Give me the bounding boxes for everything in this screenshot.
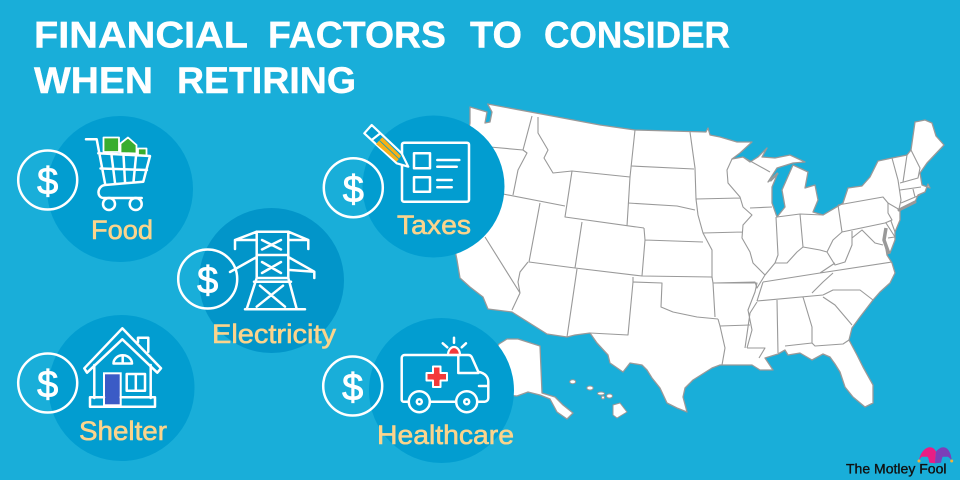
icon: dollar coin xyxy=(178,250,237,308)
label: Electricity: Electricity xyxy=(212,319,337,349)
icon: house xyxy=(84,328,161,407)
icon: dollar coin xyxy=(18,354,77,412)
food background circle xyxy=(47,116,193,262)
title xyxy=(34,14,730,101)
label: Healthcare: Healthcare xyxy=(377,420,514,450)
icon: dollar coin: $ xyxy=(37,364,58,406)
panel: food xyxy=(18,116,193,262)
title: WHEN xyxy=(34,60,153,101)
panel: shelter xyxy=(18,315,195,461)
title: FINANCIAL xyxy=(34,14,248,56)
title: RETIRING xyxy=(177,60,356,101)
map: Alaska xyxy=(480,339,573,419)
icon: dollar coin: $ xyxy=(343,169,364,211)
icon: power pylon xyxy=(230,232,314,309)
label: Food: Food xyxy=(91,215,153,245)
icon: tax form xyxy=(402,143,469,202)
icon: dollar coin xyxy=(18,150,77,210)
electricity background circle xyxy=(199,208,344,353)
title: CONSIDER xyxy=(544,14,730,56)
map: contiguous states outline xyxy=(450,104,944,412)
map: Hawaii xyxy=(570,380,627,418)
title: TO xyxy=(470,14,522,56)
icon: dollar coin xyxy=(323,356,382,416)
icon: pencil xyxy=(364,125,408,167)
icon: dollar coin: $ xyxy=(342,367,363,409)
map: United States xyxy=(450,104,944,419)
icon: dollar coin: $ xyxy=(37,161,58,203)
label: Shelter: Shelter xyxy=(79,416,167,446)
icon: shopping cart xyxy=(86,138,150,210)
title: FACTORS xyxy=(268,14,446,56)
icon: jester hat xyxy=(918,447,953,463)
shelter background circle xyxy=(48,315,194,461)
icon: dollar coin xyxy=(324,158,383,217)
panel: electricity xyxy=(178,208,344,353)
label: Taxes: Taxes xyxy=(397,210,471,240)
taxes background circle xyxy=(362,116,504,258)
icon: dollar coin: $ xyxy=(197,260,218,302)
map: Chesapeake Bay xyxy=(884,228,889,254)
map: state borders xyxy=(485,116,921,365)
panel: taxes xyxy=(324,116,504,258)
map: Long Island xyxy=(899,202,915,210)
logo wordmark: The Motley Fool xyxy=(846,460,946,476)
logo: The Motley Fool xyxy=(846,447,953,476)
icon: ambulance xyxy=(402,338,488,412)
healthcare background circle xyxy=(369,318,514,463)
map: Green Bay xyxy=(770,173,778,181)
panel: healthcare xyxy=(323,318,514,463)
